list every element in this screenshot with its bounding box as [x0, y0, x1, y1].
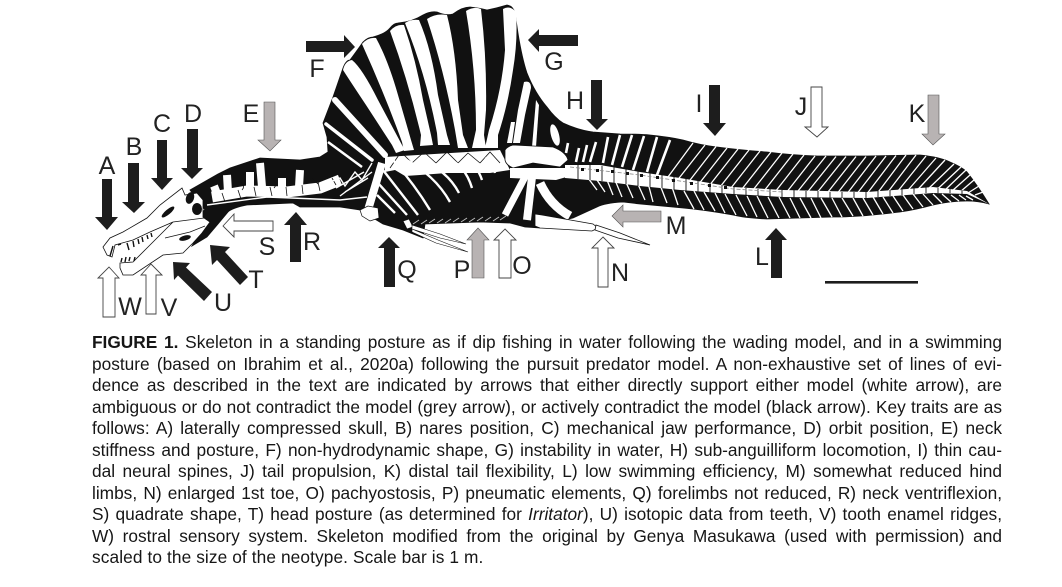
arrow A: black: A — [99, 152, 116, 180]
arrow F: black — [306, 35, 355, 83]
body silhouette — [190, 5, 989, 246]
skull — [103, 188, 210, 275]
arrow N: white — [592, 237, 629, 287]
arrow B: black: B — [126, 133, 142, 161]
sail neural spines — [326, 8, 562, 167]
figure caption: dence as described in the text are indicated by arrows that either directly support either model (white arrow), are — [92, 375, 1002, 395]
shoulder and forelimb — [360, 163, 468, 252]
arrow T: black — [210, 245, 264, 294]
figure caption: stiffness and posture, F) non-hydrodynamic shape, G) instability in water, H) sub-anguilliform locomotion, I) thin cau- — [92, 440, 1002, 460]
arrow W: white: W — [118, 293, 142, 321]
arrow K: grey — [909, 95, 945, 145]
arrow U: black: U — [214, 289, 232, 317]
arrow V: white: V — [161, 294, 178, 322]
caudal chevrons — [588, 178, 973, 218]
arrow G: black: G — [544, 48, 564, 76]
arrow G: black — [528, 29, 578, 76]
arrow P: grey: P — [454, 256, 470, 284]
arrow E: grey — [243, 100, 281, 151]
figure caption: posture (based on Ibrahim et al., 2020a) following the pursuit predator model. A non-exhaustive set of lines of evi- — [92, 354, 1002, 374]
arrow I: black: I — [696, 90, 702, 118]
arrow A: black — [95, 152, 118, 230]
gastralia — [413, 216, 506, 224]
caudal vertebral column — [565, 165, 989, 204]
arrow K: grey: K — [909, 100, 926, 128]
arrow M: grey: M — [666, 212, 686, 240]
arrow B: black — [122, 133, 145, 213]
arrow H: black: H — [566, 87, 584, 115]
figure caption — [92, 332, 1002, 567]
arrow D: black: D — [184, 100, 202, 128]
arrow H: black — [566, 80, 608, 130]
arrow I: black — [696, 85, 726, 136]
arrow L: black: L — [755, 243, 769, 271]
arrow M: grey — [612, 205, 686, 240]
neck vertebrae — [207, 163, 372, 205]
arrow Q: black: Q — [397, 256, 417, 284]
arrow Q: black — [378, 237, 417, 287]
figure caption: limbs, N) enlarged 1st toe, O) pachyostosis, P) pneumatic elements, Q) forelimbs not reduced, R) neck ventriflexion, — [92, 482, 1002, 502]
arrow N: white: N — [611, 259, 629, 287]
arrow J: white: J — [795, 93, 807, 121]
skeleton — [103, 5, 989, 275]
arrow C: black — [151, 110, 173, 190]
caudal neural spines — [566, 135, 670, 175]
arrow D: black — [181, 100, 203, 179]
figure caption: dal neural spines, J) tail propulsion, K) distal tail flexibility, L) low swimming efficiency, M) somewhat reduced hind — [92, 461, 1002, 481]
figure caption: W) rostral sensory system. Skeleton modified from the original by Genya Masukawa (used with permission) and — [92, 526, 1002, 546]
pelvis and hind limb — [505, 145, 650, 245]
arrow R: black: R — [303, 228, 321, 256]
arrow O: white — [494, 229, 532, 280]
arrow U: black — [173, 262, 232, 317]
figure caption: FIGURE 1. Skeleton in a standing posture as if dip fishing in water following the wading model, and in a swimming — [92, 332, 1002, 352]
arrow O: white: O — [512, 252, 532, 280]
arrow S: white: S — [259, 233, 275, 261]
arrow J: white — [795, 87, 828, 137]
arrow L: black — [755, 228, 787, 278]
arrow T: black: T — [248, 266, 264, 294]
arrow P: grey — [454, 228, 489, 284]
arrow V: white — [141, 264, 178, 322]
arrow C: black: C — [153, 110, 171, 138]
arrow F: black: F — [309, 55, 325, 83]
arrow S: white — [223, 214, 275, 261]
arrow W: white — [98, 267, 142, 321]
arrow E: grey: E — [243, 100, 259, 128]
figure caption: S) quadrate shape, T) head posture (as determined for Irritator), U) isotopic data from teeth, V) tooth enamel ridges, — [92, 504, 1002, 524]
scale bar — [825, 281, 918, 284]
figure caption: ambiguous or do not contradict the model (grey arrow), or actively contradict the model (black arrow). Key traits are as — [92, 396, 1002, 416]
arrow R: black — [284, 212, 321, 262]
figure caption: scaled to the size of the neotype. Scale bar is 1 m. — [92, 547, 483, 567]
dorsal vertebrae and ribs — [377, 150, 510, 215]
figure caption: follows: A) laterally compressed skull, B) nares position, C) mechanical jaw performance, D) orbit position, E) neck — [92, 418, 1002, 438]
